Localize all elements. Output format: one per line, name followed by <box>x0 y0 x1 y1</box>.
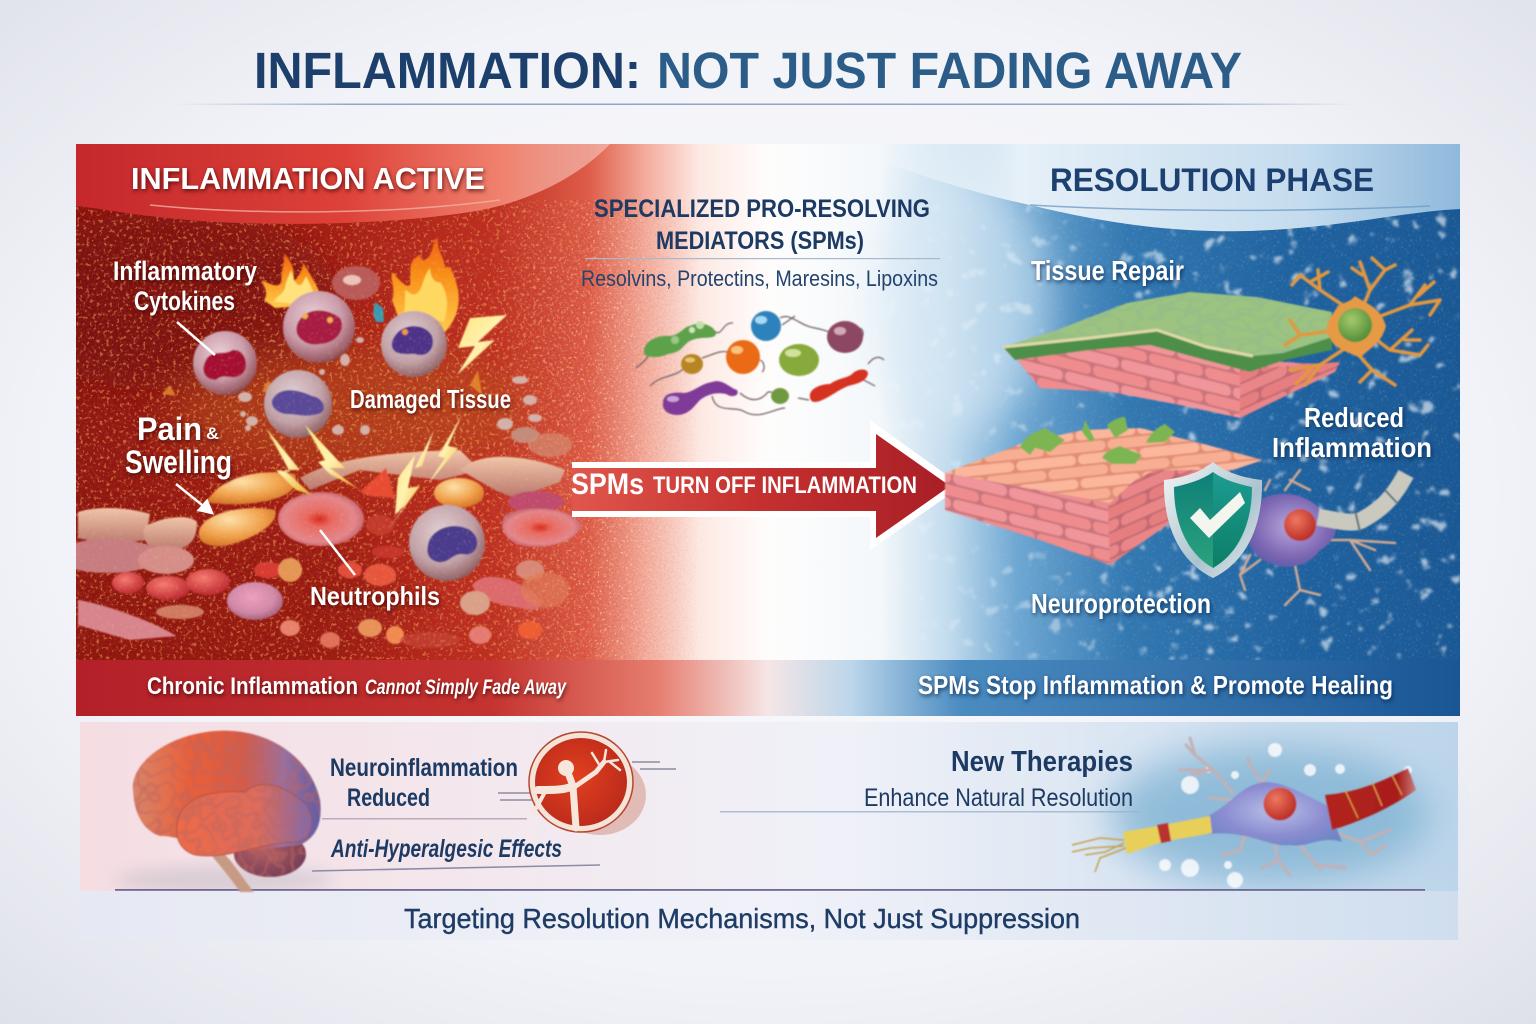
header band: resolution phase: RESOLUTION PHASE <box>1050 162 1374 198</box>
label: reduced inflammation: Reduced <box>1304 402 1404 433</box>
text: neuroinflammation reduced: Reduced <box>347 784 430 812</box>
label: pain and swelling: Swelling <box>125 444 232 480</box>
illustration: inflammatory scene <box>56 237 636 650</box>
band: summary statements <box>76 660 1460 716</box>
header band: inflammation active: INFLAMMATION ACTIVE <box>131 161 485 196</box>
label: neuroprotection: Neuroprotection <box>1031 588 1211 619</box>
label: damaged tissue: Damaged Tissue <box>350 384 511 414</box>
title: NOT JUST FADING AWAY <box>657 42 1242 99</box>
illustration: purple neuron <box>1240 470 1406 605</box>
illustration: neuron with myelin <box>1072 738 1416 888</box>
cell: neutrophil <box>278 492 364 546</box>
label: inflammatory cytokines <box>113 256 257 355</box>
header band: inflammation active <box>76 144 610 224</box>
illustration: SPM molecules <box>636 311 884 415</box>
scattered stones <box>162 302 572 457</box>
text: anti-hyperalgesic effects: Anti-Hyperalgesic Effects <box>330 835 562 863</box>
text: new therapies: Enhance Natural Resolution <box>864 784 1133 812</box>
label: neutrophils <box>310 530 440 611</box>
label: reduced inflammation <box>1272 402 1432 463</box>
cell: small oval cell <box>332 266 380 300</box>
label: pain and swelling <box>125 411 232 513</box>
flames <box>262 237 459 332</box>
heading: specialized pro-resolving mediators: SPECIALIZED PRO-RESOLVING <box>594 195 930 223</box>
header band: resolution phase <box>912 144 1460 232</box>
label: inflammatory cytokines: Inflammatory <box>113 256 257 286</box>
cell: pink cell <box>227 582 283 620</box>
label: neutrophils: Neutrophils <box>310 581 440 611</box>
panel: clinical implications <box>80 722 1458 940</box>
label: pain and swelling: Pain <box>137 411 202 447</box>
cell: right cell <box>381 311 447 377</box>
band: summary statements: Chronic Inflammation <box>147 673 358 700</box>
band: summary statements: SPMs Stop Inflammation & Promote Healing <box>918 670 1393 700</box>
cell: cytokine cell <box>193 331 257 395</box>
title <box>172 42 1358 105</box>
arrow: SPMs turn off inflammation <box>571 420 962 550</box>
label: pain and swelling: & <box>206 424 219 443</box>
arrow: SPMs turn off inflammation: TURN OFF INFLAMMATION <box>653 472 917 499</box>
text: targeting resolution: Targeting Resolution Mechanisms, Not Just Suppression <box>404 903 1080 934</box>
heading: specialized pro-resolving mediators: Resolvins, Protectins, Maresins, Lipoxins <box>581 266 938 291</box>
icon: shield with check <box>1164 462 1262 578</box>
cell: centre cell <box>264 370 332 438</box>
title: INFLAMMATION: <box>254 42 641 99</box>
illustration: tissue repair <box>1000 288 1340 418</box>
illustration: brain <box>130 726 325 892</box>
label: reduced inflammation: Inflammation <box>1272 432 1432 463</box>
band: summary statements: Cannot Simply Fade Away <box>365 676 567 699</box>
arrow: SPMs turn off inflammation: SPMs <box>571 468 644 501</box>
text: new therapies: New Therapies <box>951 746 1133 778</box>
label: tissue repair: Tissue Repair <box>1031 255 1184 286</box>
lightning bolts <box>266 315 507 530</box>
illustration: orange neuron <box>1285 258 1440 385</box>
illustration: regenerating tissue slab <box>945 417 1263 565</box>
text: neuroinflammation reduced <box>322 754 527 820</box>
text: anti-hyperalgesic effects <box>312 835 600 871</box>
label: inflammatory cytokines: Cytokines <box>134 286 235 316</box>
panel: main comparison <box>0 144 1460 716</box>
cell: upper cell <box>283 291 355 363</box>
heading: specialized pro-resolving mediators <box>581 195 940 291</box>
text: neuroinflammation reduced: Neuroinflammation <box>330 754 518 782</box>
cell: lower cell <box>409 505 485 581</box>
icon: nerve cross-section <box>498 732 676 835</box>
text: new therapies <box>720 746 1140 812</box>
tissue: left stones <box>56 450 582 648</box>
heading: specialized pro-resolving mediators: MEDIATORS (SPMs) <box>656 227 864 255</box>
